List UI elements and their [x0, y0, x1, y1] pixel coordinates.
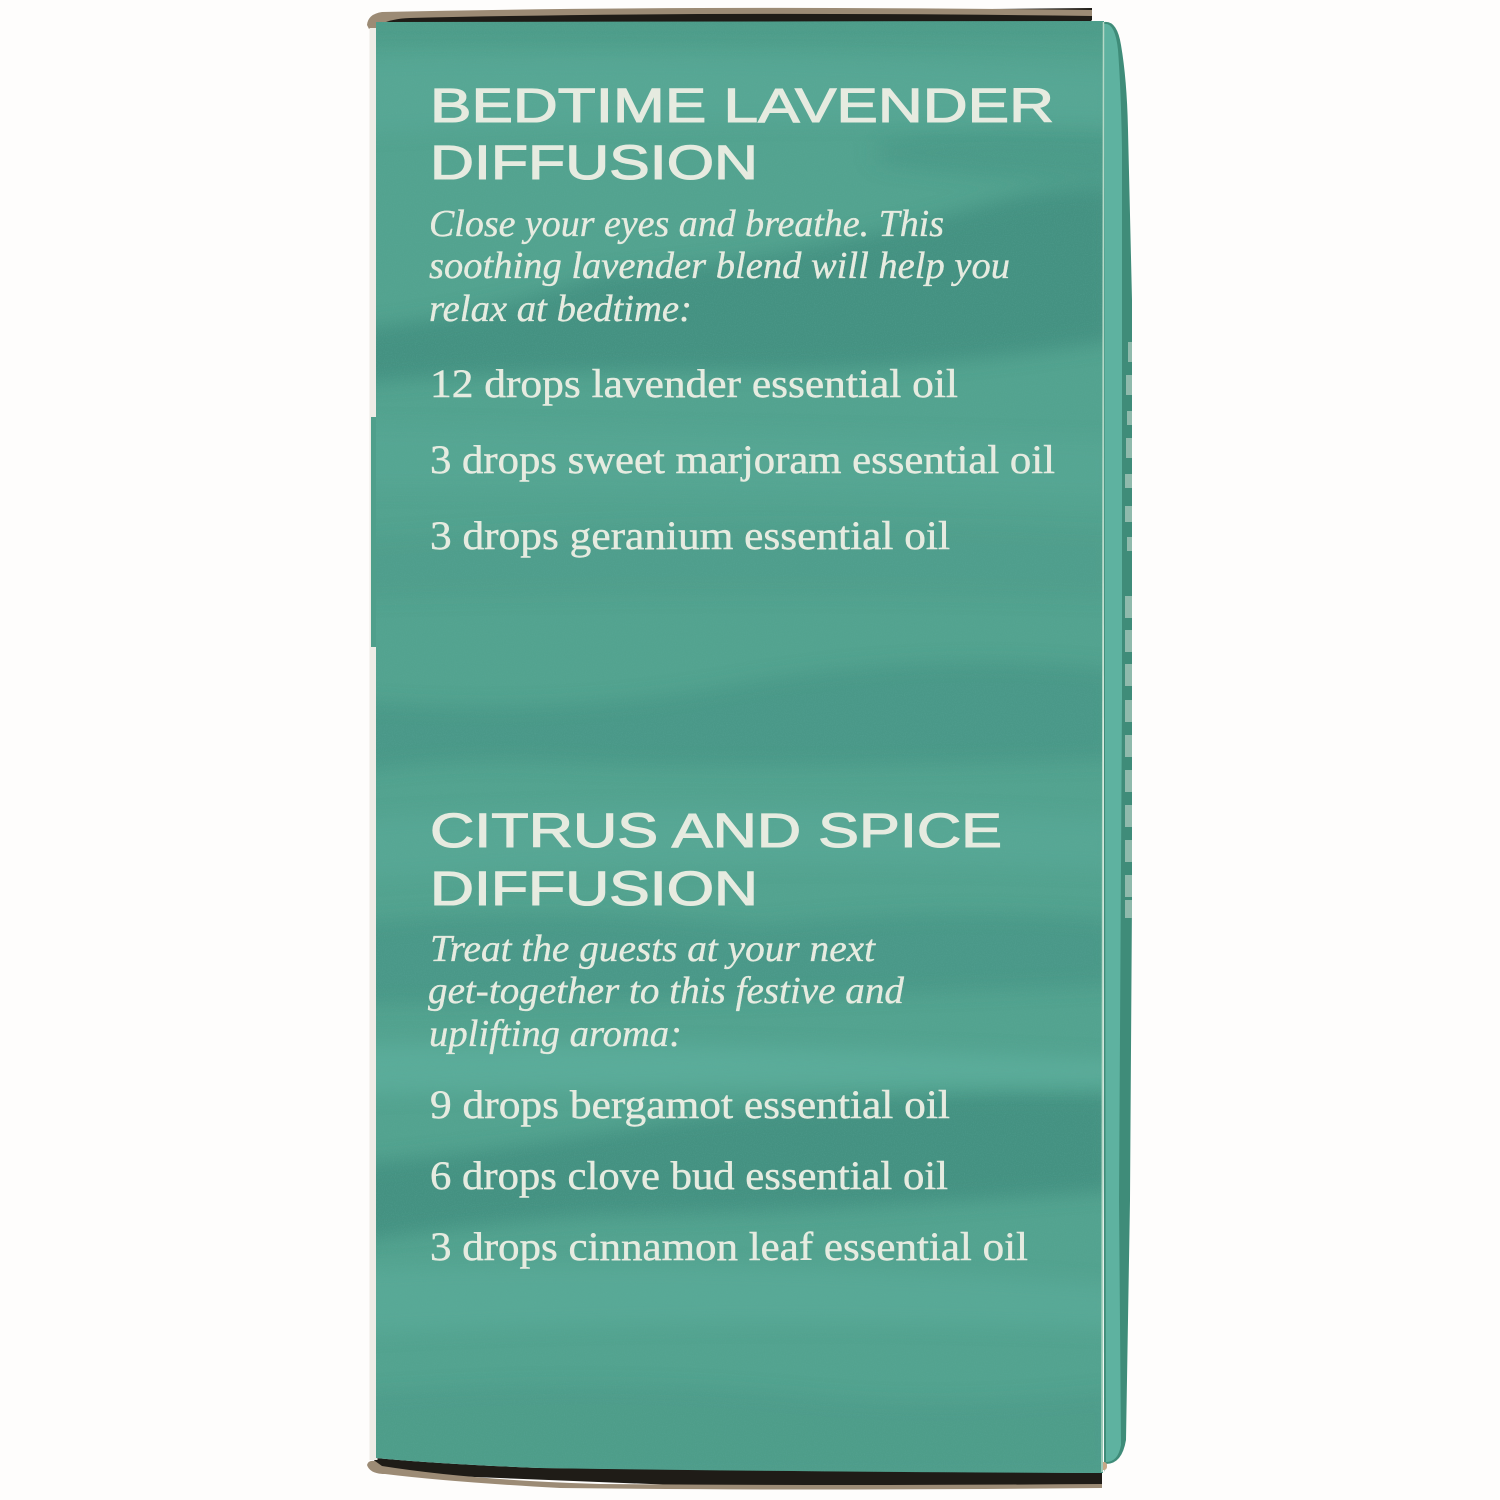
recipe: citrus and spice diffusion — [428, 805, 1028, 1269]
teal wave background — [340, 14, 1120, 1480]
ingredient list: bedtime lavender: 3 drops geranium essential oil — [430, 513, 950, 558]
left glue tab — [371, 417, 379, 647]
heading: bedtime lavender diffusion — [430, 80, 1054, 190]
ingredient list: citrus and spice: 9 drops bergamot essential oil — [430, 1082, 950, 1127]
intro text: citrus and spice: Treat the guests at your next — [430, 928, 876, 970]
heading: citrus and spice diffusion: DIFFUSION — [430, 863, 758, 916]
side flap — [1100, 22, 1132, 1472]
bottom cardboard edge — [367, 1458, 1102, 1490]
heading: bedtime lavender diffusion: DIFFUSION — [430, 137, 758, 190]
intro text: citrus and spice: uplifting aroma: — [429, 1013, 682, 1055]
intro text: bedtime lavender: Close your eyes and breathe. This — [429, 203, 944, 245]
ingredient list: bedtime lavender — [430, 361, 1055, 558]
heading: citrus and spice diffusion — [430, 805, 1002, 916]
ingredient list: citrus and spice — [430, 1082, 1028, 1269]
intro text: bedtime lavender: soothing lavender blend will help you — [429, 245, 1010, 287]
heading: bedtime lavender diffusion: BEDTIME LAVENDER — [430, 80, 1054, 133]
intro text: bedtime lavender: relax at bedtime: — [429, 288, 692, 330]
recipe: bedtime lavender diffusion — [429, 80, 1055, 558]
ingredient list: bedtime lavender: 12 drops lavender essential oil — [430, 361, 958, 406]
intro text: citrus and spice — [428, 928, 905, 1055]
heading: citrus and spice diffusion: CITRUS AND SPICE — [430, 805, 1002, 858]
fold line — [1102, 22, 1104, 1472]
intro text: citrus and spice: get-together to this festive and — [428, 970, 905, 1012]
top cardboard edge — [367, 8, 1092, 29]
ingredient list: citrus and spice: 6 drops clove bud essential oil — [430, 1153, 948, 1198]
left white paper strip — [370, 28, 378, 1460]
ingredient list: bedtime lavender: 3 drops sweet marjoram essential oil — [430, 437, 1055, 482]
box side panel — [367, 8, 1132, 1490]
ingredient list: citrus and spice: 3 drops cinnamon leaf essential oil — [430, 1224, 1028, 1269]
intro text: bedtime lavender — [429, 203, 1010, 330]
